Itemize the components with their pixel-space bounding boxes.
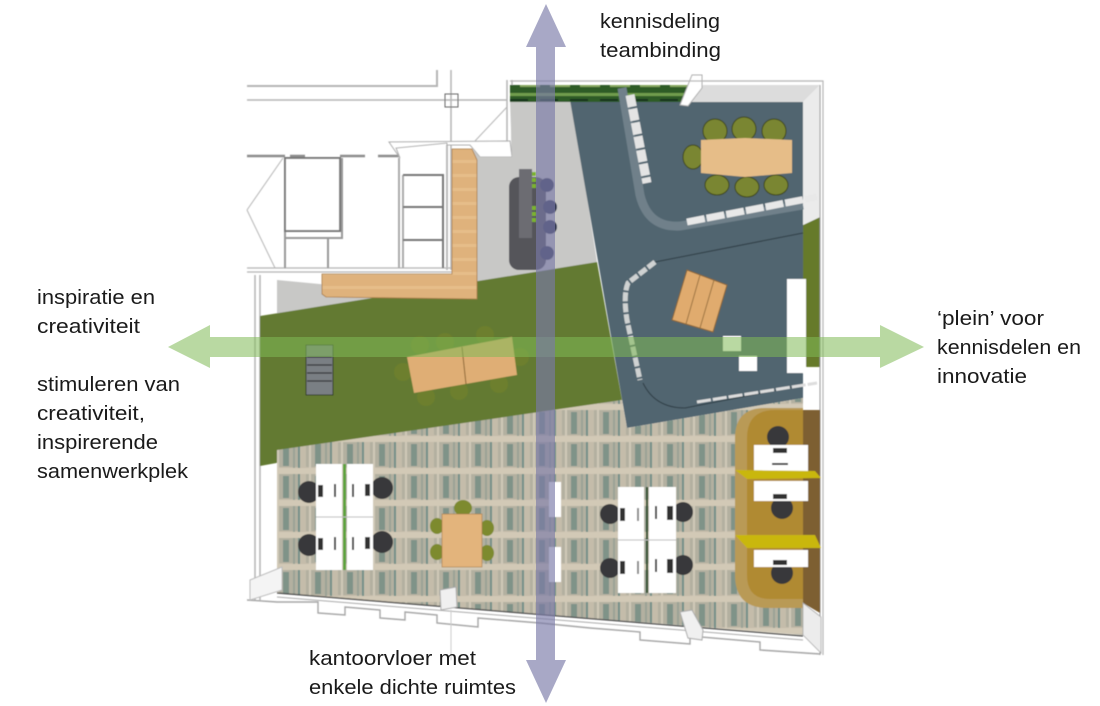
text: bottom label: kantoorvloer met bbox=[309, 647, 476, 670]
text: top label bbox=[600, 10, 721, 62]
text: right label: ‘plein’ voor bbox=[937, 307, 1044, 330]
arrow: green horizontal bbox=[168, 325, 924, 368]
floor: blue-grey zone bbox=[570, 100, 803, 428]
text: bottom label bbox=[309, 647, 516, 699]
floor: green zone bbox=[260, 262, 622, 466]
green wall bbox=[510, 85, 688, 102]
text: right label: kennisdelen en bbox=[937, 336, 1081, 359]
text: right label: innovatie bbox=[937, 365, 1027, 388]
text: right label bbox=[937, 307, 1081, 388]
arrow: purple vertical bbox=[526, 4, 566, 703]
meeting table with chairs bbox=[683, 117, 792, 197]
text: left label: inspiratie en bbox=[37, 286, 155, 309]
rooms bbox=[285, 145, 447, 270]
white counters bbox=[723, 279, 806, 373]
plein wooden table bbox=[672, 270, 727, 332]
text: bottom label: enkele dichte ruimtes bbox=[309, 676, 516, 699]
green zone table bbox=[394, 326, 529, 406]
orange focus room bbox=[735, 408, 821, 613]
lower walls and columns bbox=[247, 567, 821, 660]
text: left label: samenwerkplek bbox=[37, 460, 189, 483]
text: left label: stimuleren van bbox=[37, 373, 180, 396]
centre small table bbox=[430, 500, 494, 567]
plein curve bbox=[625, 233, 817, 408]
text: left label: inspirerende bbox=[37, 431, 158, 454]
curved glass partition bbox=[622, 88, 817, 226]
floor: green strip right bbox=[803, 217, 820, 367]
desks left bbox=[298, 464, 393, 570]
text: left label: creativiteit bbox=[37, 315, 140, 338]
foosball table bbox=[306, 345, 333, 395]
text: left label bbox=[37, 286, 189, 483]
text: left label: creativiteit, bbox=[37, 402, 145, 425]
existing building outlines top left bbox=[247, 70, 512, 600]
floor: grey zone bbox=[277, 100, 597, 318]
small white desks under arrow bbox=[549, 482, 561, 582]
bench with planter bbox=[509, 169, 557, 270]
top right wall bbox=[510, 75, 823, 655]
ledge bbox=[389, 141, 512, 158]
text: top label: kennisdeling bbox=[600, 10, 720, 33]
wood L-shaped cabinet bbox=[322, 149, 477, 299]
floor plan bbox=[247, 70, 823, 660]
desks right bbox=[600, 487, 693, 593]
text: top label: teambinding bbox=[600, 39, 721, 62]
floor: office carpet bbox=[277, 398, 803, 635]
